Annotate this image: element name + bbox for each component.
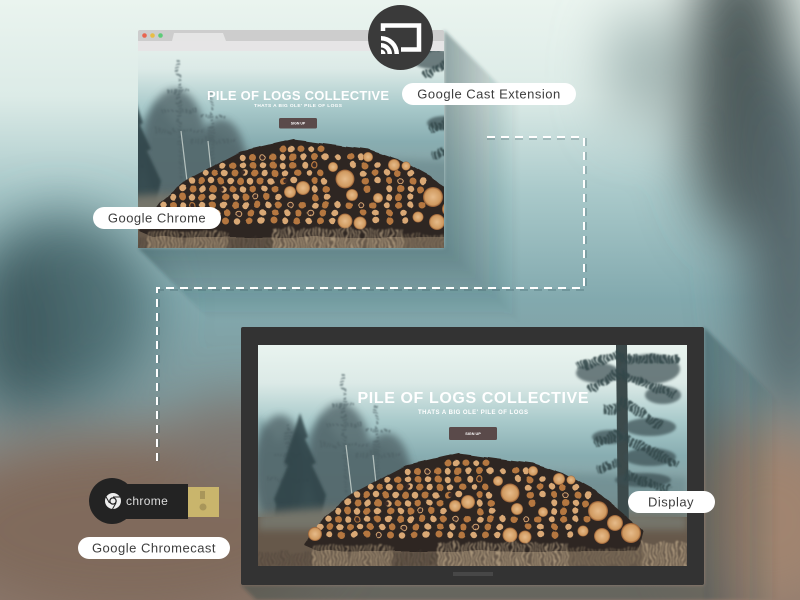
browser page heading: PILE OF LOGS COLLECTIVE <box>207 88 389 103</box>
browser tab <box>172 33 226 41</box>
display bezel <box>241 327 704 585</box>
label: Google Chromecast <box>78 537 230 559</box>
window control dots <box>142 33 163 38</box>
browser page subheading: THATS A BIG OLE' PILE OF LOGS <box>254 103 343 109</box>
label: Google Cast Extension: Google Cast Extension <box>417 86 561 102</box>
connector contacts <box>200 491 206 510</box>
display page heading: PILE OF LOGS COLLECTIVE <box>358 390 589 407</box>
usb connector <box>188 487 219 517</box>
dashed connector <box>157 137 586 465</box>
browser toolbar <box>138 41 444 52</box>
display screen photo <box>258 345 687 566</box>
browser tab bar <box>138 30 444 42</box>
display page subheading: THATS A BIG OLE' PILE OF LOGS <box>418 410 528 416</box>
chromecast dongle <box>89 478 219 524</box>
icon: cast button <box>368 5 433 70</box>
display <box>241 327 704 585</box>
icon: chrome logo <box>105 493 121 509</box>
label: Google Cast Extension <box>402 83 576 105</box>
label: Display <box>628 491 715 513</box>
browser sign up button <box>279 118 317 128</box>
long shadows <box>138 30 780 600</box>
label: Display: Display <box>648 494 694 510</box>
display sign up button: SIGN UP <box>465 432 481 436</box>
label: Google Chrome: Google Chrome <box>108 210 206 226</box>
dongle body <box>89 478 188 524</box>
display slot <box>453 572 493 576</box>
display sign up button <box>449 427 497 440</box>
chrome wordmark: chrome <box>126 494 168 508</box>
label: Google Chrome <box>93 207 221 229</box>
browser window <box>89 30 522 253</box>
browser page photo <box>138 51 444 248</box>
browser sign up button: SIGN UP <box>291 122 306 126</box>
label: Google Chromecast: Google Chromecast <box>92 540 216 556</box>
